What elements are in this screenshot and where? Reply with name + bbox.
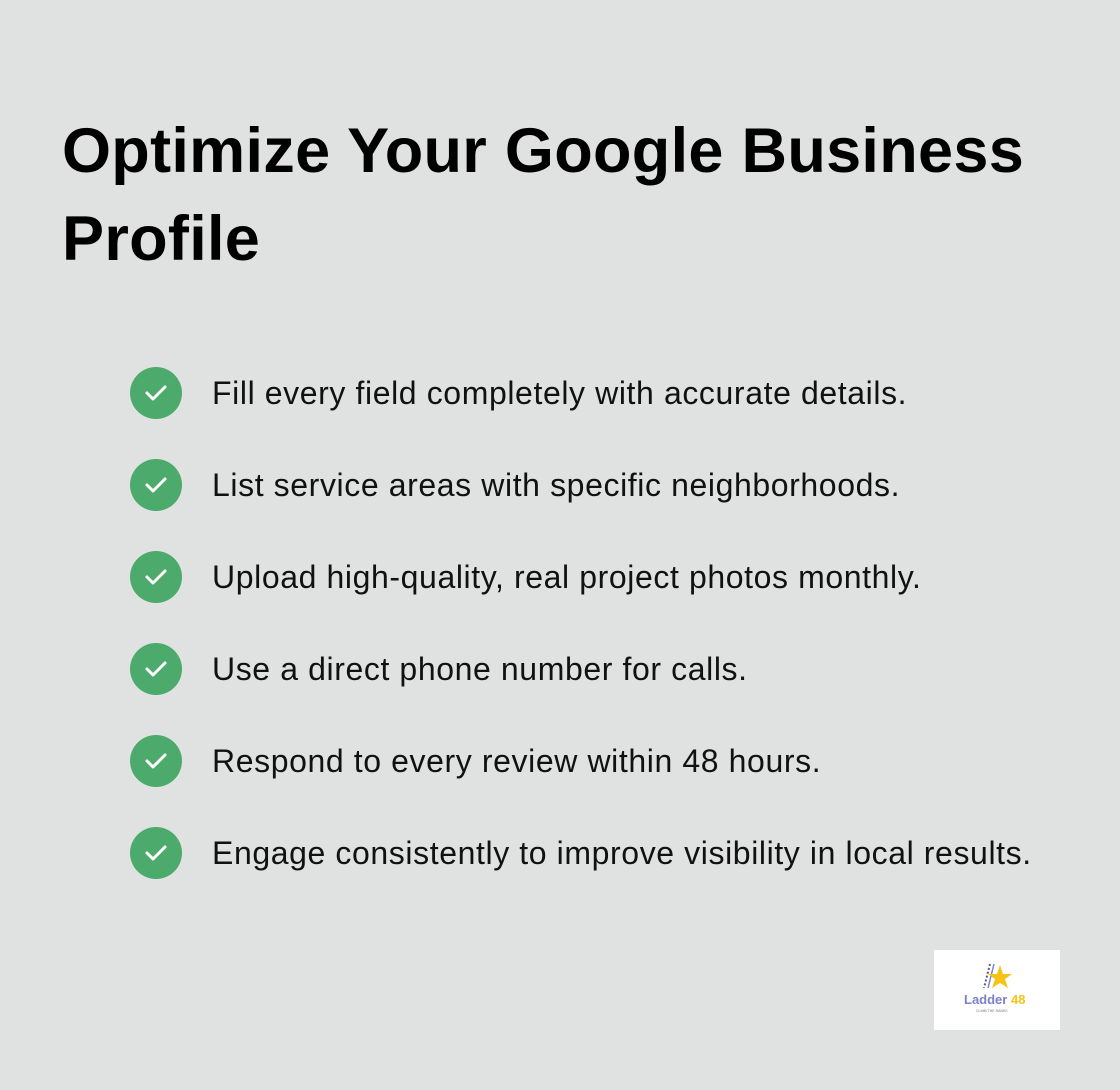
item 6 [130, 827, 1032, 879]
text: Respond to every review within 48 hours. [212, 743, 821, 779]
title: Profile [62, 204, 260, 274]
logo: CLIMB THE RANKS [976, 1009, 1008, 1013]
icon: check [130, 827, 182, 879]
item 2 [130, 459, 900, 511]
item 1 [130, 367, 907, 419]
text: Fill every field completely with accurate details. [212, 375, 907, 411]
icon: check [130, 367, 182, 419]
item 3 [130, 551, 921, 603]
text: Engage consistently to improve visibility in local results. [212, 835, 1032, 871]
item 5 [130, 735, 821, 787]
icon: check [130, 643, 182, 695]
title: Optimize Your Google Business [62, 116, 1024, 186]
icon: check [130, 459, 182, 511]
text: Use a direct phone number for calls. [212, 651, 748, 687]
logo [934, 950, 1060, 1030]
icon: check [130, 735, 182, 787]
text: Upload high-quality, real project photos monthly. [212, 559, 921, 595]
item 4 [130, 643, 748, 695]
logo: Ladder 48 [964, 992, 1025, 1007]
icon: check [130, 551, 182, 603]
title [62, 116, 1024, 274]
text: List service areas with specific neighborhoods. [212, 467, 900, 503]
